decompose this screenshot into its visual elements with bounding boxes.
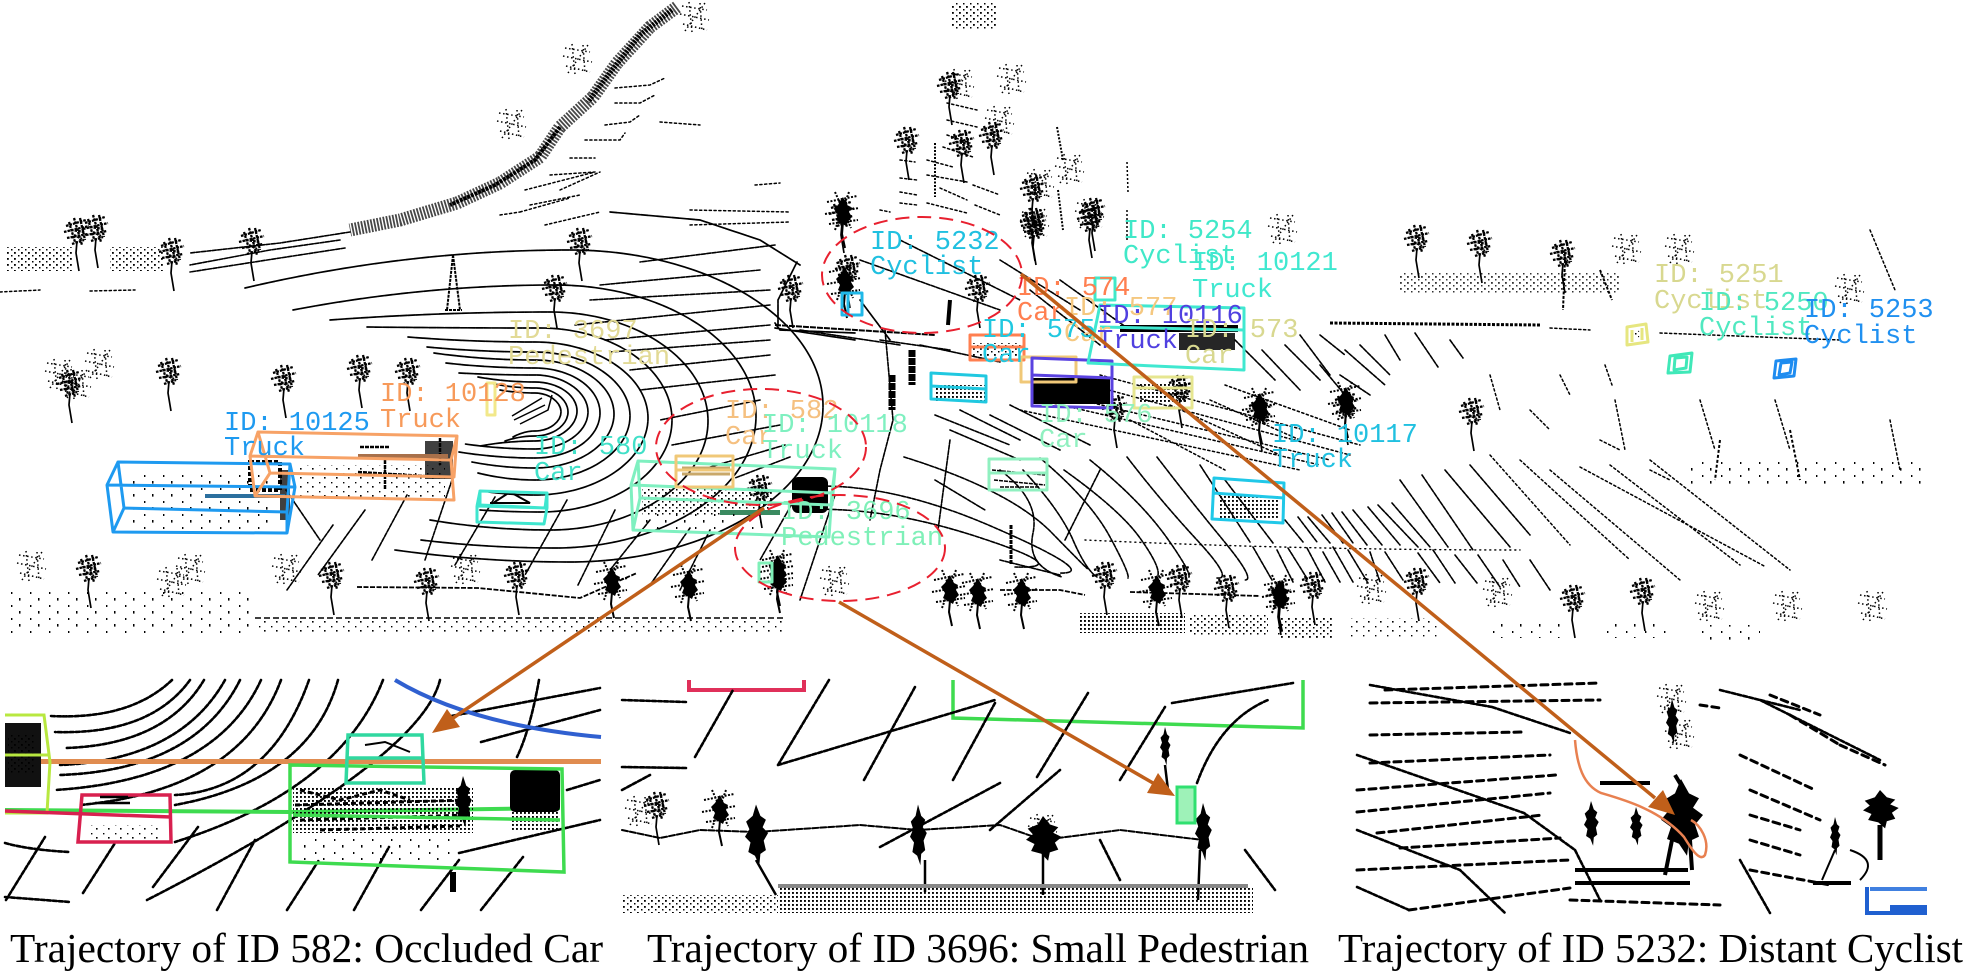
label: ID 10121: Truck [1192,276,1273,306]
label: ID 10117: ID: 10117 [1272,421,1418,451]
label: ID 10121 [1192,249,1338,306]
tree blobs [625,727,1212,900]
3D box: ID 574 car [970,335,1024,360]
label: ID 10116 [1097,302,1243,357]
blue box corner [1867,887,1927,913]
3D box: ID 5254 cyclist [1095,278,1115,300]
3D box: ID 10125 truck [107,462,295,533]
3D box: ID 10121 truck [1088,305,1244,370]
label: ID 5253: Cyclist [1804,322,1917,352]
label: ID 3696 [781,498,943,554]
green box fragment [953,680,1303,728]
label: ID 5232 [870,228,1000,283]
point cloud: central pole cluster [775,3,1297,345]
label: ID 10118: ID: 10118 [762,411,908,441]
label: ID 582: ID: 582 [725,397,838,427]
point cloud: road arcs lower right [800,375,1790,590]
label: ID 5232: Cyclist [870,253,983,283]
caption: ID 3696: Trajectory of ID 3696: Small Pedestrian [647,925,1309,971]
label: ID 5253 [1804,296,1934,352]
label: ID 577: ID: 577 [1064,294,1177,324]
label: ID 5251: Cyclist [1654,287,1767,317]
orange trajectory [1575,740,1706,857]
3D box: ID 10117 truck [1212,478,1284,523]
label: ID 5253: ID: 5253 [1804,296,1934,326]
panel: trajectory of ID 5232 [1357,680,1927,913]
point cloud: clutter inside vehicle boxes [130,325,1640,606]
label: ID 3697: ID: 3697 [508,317,638,347]
label: ID 574 [1017,274,1130,329]
label: ID 5251: ID: 5251 [1654,261,1784,291]
arrow: to small pedestrian [839,602,1175,796]
caption: ID 5232: Trajectory of ID 5232: Distant Cyclist [1338,925,1964,971]
noisy ground strip [622,895,778,913]
3D box: ID 5232 cyclist [842,293,862,315]
label: ID 573: Car [1185,342,1234,372]
panel: trajectory of ID 582 [5,680,601,913]
panel: trajectory of ID 3696 [622,680,1338,913]
label: ID 3697: Pedestrian [508,343,670,373]
label: ID 580 [534,433,647,489]
label: ID 573 [1185,316,1298,372]
highlight ellipse: small pedestrian [735,495,945,601]
label: ID 10117 [1272,421,1418,476]
ground line [622,825,1203,840]
label: ID 10125: ID: 10125 [224,409,370,439]
label: ID 5250: Cyclist [1699,314,1812,344]
red box [5,795,171,842]
label: ID 10116: Truck [1097,327,1178,357]
arrow: to distant cyclist [1021,274,1675,815]
orange trajectory band [5,759,601,764]
label: ID 10116: ID: 10116 [1097,302,1243,332]
label: ID 3697 [508,317,670,373]
highlight ellipse: distant cyclist [822,217,1022,333]
label: ID 580: ID: 580 [534,433,647,463]
label: ID 5254 [1123,217,1253,272]
point cloud: concentric rings [245,245,1090,600]
trees [1584,684,1899,880]
curved road edges [1357,685,1880,913]
label: ID 5251 [1654,261,1784,317]
label: ID 5250: ID: 5250 [1699,289,1829,319]
label: ID 10128: ID: 10128 [380,380,526,410]
3D box: ID 575 car [931,373,986,402]
label: ID 582 [725,397,838,453]
label: ID 582: Car [725,423,774,453]
point cloud: main LiDAR scene [0,2,1930,640]
highlight ellipse: occluded car [656,389,866,505]
label: ID 10117: Truck [1272,446,1353,476]
3D box: ID 5250 cyclist [1668,353,1692,373]
vehicle clutter [293,787,473,833]
label: ID 573: ID: 573 [1185,316,1298,346]
label: ID 575 [982,316,1095,371]
yellow-green box [5,715,50,813]
label: ID 575: Car [982,341,1031,371]
label: ID 5232: ID: 5232 [870,228,1000,258]
label: ID 577 [1064,294,1177,350]
label: ID 10125 [224,409,370,464]
label: ID 3696: ID: 3696 [781,498,911,528]
platform [1575,783,1851,883]
label: ID 10128 [380,380,526,436]
green horizontal band [5,808,560,812]
dashed lidar rings [622,680,1293,890]
3D box: ID 5251 cyclist [1627,324,1648,345]
dash rows [1357,683,1885,910]
green 3D box [290,765,564,872]
label: ID 5254: ID: 5254 [1123,217,1253,247]
arrow: to occluded car [432,508,764,733]
label: ID 574: Car [1017,299,1066,329]
pedestrian box [1177,787,1195,823]
3D box: ID 580 car [477,491,547,524]
caption: ID 582: Trajectory of ID 582: Occluded Car [10,925,603,971]
label: ID 576 [1039,401,1152,456]
teal target box [346,735,424,783]
3D box: ID 3697 pedestrian [487,383,495,415]
label: ID 574: ID: 574 [1017,274,1130,304]
black clutter left [5,723,41,787]
label: ID 577: Car [1064,320,1113,350]
3D box: ID 3696 pedestrian [759,563,772,582]
blue curve [395,680,601,737]
3D box: ID 573 car [1134,377,1192,408]
3D box: ID 582 car [676,456,733,487]
label: ID 10125: Truck [224,434,305,464]
label: ID 580: Car [534,459,583,489]
3D box: ID 577 car [1021,357,1076,382]
point cloud: left grid and trees [0,200,854,423]
3D box: ID 10116 truck [1032,358,1112,408]
3D box: ID 10118 truck [631,461,835,537]
labels: detection IDs and classes [224,217,1934,554]
point cloud: lower tree row and hedges [5,551,1887,640]
3D box: ID 10128 truck [250,432,457,500]
label: ID 10128: Truck [380,406,461,436]
rings in panel 1 [5,680,600,910]
label: ID 576: ID: 576 [1039,401,1152,431]
label: ID 576: Car [1039,426,1088,456]
label: ID 10121: ID: 10121 [1192,249,1338,279]
label: ID 575: ID: 575 [982,316,1095,346]
label: ID 5250 [1699,289,1829,344]
3D box: ID 5253 cyclist [1774,359,1796,378]
red box fragment [689,680,804,690]
label: ID 3696: Pedestrian [781,524,943,554]
point cloud: far wall band [190,2,800,272]
label: ID 10118: Truck [762,437,843,467]
point cloud: far right trees and dashes [1235,225,1930,485]
label: ID 5254: Cyclist [1123,242,1236,272]
label: ID 10118 [762,411,908,467]
3D box: ID 576 car [989,459,1047,490]
